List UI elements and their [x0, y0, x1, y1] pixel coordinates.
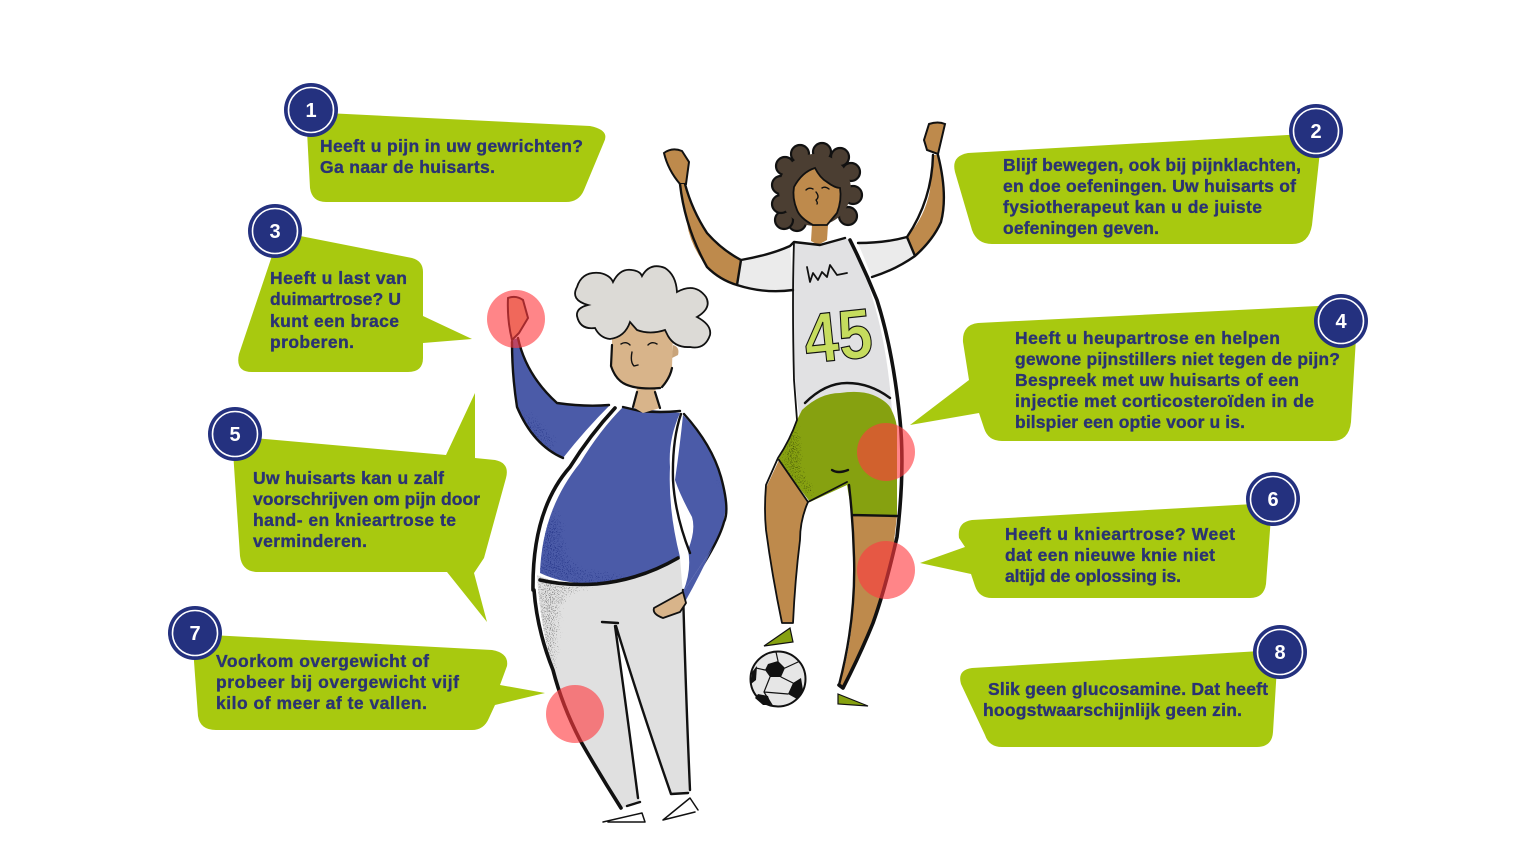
woman: trouser outlines	[534, 590, 690, 808]
bubble 8 text: Slik geen glucosamine. Dat heeft	[988, 679, 1268, 699]
bubble 8 badge: 8	[1274, 642, 1286, 664]
bubble 4 text: bilspier een optie voor u is.	[1015, 412, 1245, 432]
bubble 1 badge: 1	[305, 100, 317, 122]
bubble 7	[168, 606, 545, 730]
bubble 3 badge: 3	[269, 221, 281, 243]
woman: hair	[575, 266, 710, 348]
athlete: left arm	[680, 184, 741, 285]
bubble 6 text: dat een nieuwe knie niet	[1005, 545, 1215, 565]
athlete: shirt number: 45	[800, 294, 876, 378]
bubble 3 text	[270, 268, 407, 352]
bubble 1 shape	[306, 112, 605, 202]
athlete: neck	[811, 225, 828, 245]
athlete: shirt chest graph	[807, 265, 847, 282]
bubble 2 badge: 2	[1310, 121, 1322, 143]
athlete: right arm	[907, 155, 943, 256]
woman: hand on hip	[654, 592, 686, 618]
woman: ear	[672, 345, 678, 358]
bubble 3 text: duimartrose? U	[270, 289, 401, 309]
athlete: right sleeve	[858, 237, 915, 277]
athlete: right leg	[839, 516, 897, 688]
bubble 5	[208, 393, 507, 622]
woman: torso shading	[540, 509, 624, 582]
bubble 6 text	[1005, 524, 1235, 586]
bubble 7 text	[216, 651, 459, 713]
bubble 4 text: Bespreek met uw huisarts of een	[1015, 370, 1299, 390]
bubble 7 badge	[168, 606, 222, 660]
bubble 7 text: Voorkom overgewicht of	[216, 651, 429, 671]
bubble 2 shape	[954, 133, 1322, 244]
woman: torso	[540, 407, 680, 583]
bubble 4 shape with tail	[910, 304, 1358, 441]
athlete: shorts shading	[780, 426, 877, 514]
illustration: older woman with arthritis	[508, 266, 730, 822]
bubble 4 badge: 4	[1335, 311, 1347, 333]
bubble 7 text: probeer bij overgewicht vijf	[216, 672, 459, 692]
bubble 5 badge: 5	[229, 424, 241, 446]
bubble 3 shape with tail	[238, 232, 472, 372]
woman: neck	[633, 388, 660, 413]
bubble 4 text: injectie met corticosteroïden in de	[1015, 391, 1314, 411]
bubble 6 text: Heeft u knieartrose? Weet	[1005, 524, 1235, 544]
woman: trousers	[537, 558, 690, 808]
bubble 2 text	[1003, 155, 1301, 238]
woman: hand	[508, 297, 528, 340]
athlete: shorts	[778, 392, 897, 515]
woman: shoes	[603, 798, 698, 822]
athlete: left hand	[664, 149, 689, 184]
athlete: sleeve shading	[737, 248, 915, 294]
bubble 8	[960, 625, 1307, 747]
woman: raised arm shading	[522, 410, 557, 450]
illustration: athlete with football	[664, 122, 945, 706]
athlete: left thigh and shin	[765, 460, 808, 623]
woman: raised arm	[512, 338, 610, 458]
bubble 6 badge: 6	[1267, 489, 1279, 511]
bubble 6 text: altijd de oplossing is.	[1005, 566, 1181, 586]
bubble 4 text: Heeft u heupartrose en helpen	[1015, 328, 1280, 348]
bubble 1 text: Heeft u pijn in uw gewrichten?	[320, 136, 583, 156]
athlete: right hand	[924, 122, 945, 154]
bubble 1 badge	[284, 83, 338, 137]
bubble 7 text: kilo of meer af te vallen.	[216, 693, 427, 713]
bubble 4 text	[1015, 328, 1340, 432]
bubble 8 text	[983, 679, 1268, 720]
athlete: face details	[806, 187, 829, 204]
woman: face details	[611, 343, 672, 408]
bubble 4	[910, 294, 1368, 441]
athlete: left sleeve	[737, 246, 793, 291]
bubble 1 text	[320, 136, 583, 177]
bubble 8 badge	[1253, 625, 1307, 679]
bubble 1 text: Ga naar de huisarts.	[320, 157, 495, 177]
bubble 7 shape with tail	[192, 634, 545, 730]
bubble 5 shape with tails	[232, 393, 507, 622]
athlete: shirt	[793, 238, 892, 420]
bubble 5 text: voorschrijven om pijn door	[253, 489, 480, 509]
bubble 2 text: Blijf bewegen, ook bij pijnklachten,	[1003, 155, 1301, 175]
bubble 5 badge	[208, 407, 262, 461]
bubble 6	[920, 472, 1300, 598]
bubble 4 text: gewone pijnstillers niet tegen de pijn?	[1015, 349, 1340, 369]
athlete: hair	[772, 143, 862, 231]
bubble 3 text: Heeft u last van	[270, 268, 407, 288]
woman: trouser shading	[538, 576, 592, 668]
woman: body outlines	[512, 338, 726, 592]
bubble 1	[284, 83, 605, 202]
bubble 3 text: proberen.	[270, 332, 354, 352]
woman: right arm shading	[716, 478, 720, 482]
bubble 2 badge	[1289, 104, 1343, 158]
athlete: body outlines	[680, 155, 944, 688]
pain marker: thumb	[487, 290, 545, 348]
bubble 6 shape with tail	[920, 503, 1272, 598]
bubble 5 text: Uw huisarts kan u zalf	[253, 468, 444, 488]
football	[750, 652, 806, 706]
bubble 3	[238, 204, 472, 372]
bubble 4 badge	[1314, 294, 1368, 348]
bubble 2 text: oefeningen geven.	[1003, 218, 1159, 238]
bubble 7 badge: 7	[189, 623, 201, 645]
woman: right arm	[675, 415, 726, 592]
bubble 2 text: fysiotherapeut kan u de juiste	[1003, 197, 1262, 217]
woman: face	[612, 322, 673, 390]
pain marker: hip	[857, 423, 915, 481]
bubble 5 text	[253, 468, 480, 551]
pain marker: knee woman	[546, 685, 604, 743]
bubble 5 text: verminderen.	[253, 531, 367, 551]
bubble 8 text: hoogstwaarschijnlijk geen zin.	[983, 700, 1242, 720]
bubble 8 shape	[960, 650, 1278, 747]
bubble 2	[954, 104, 1343, 244]
bubble 3 text: kunt een brace	[270, 311, 399, 331]
woman: right sleeve end	[683, 547, 713, 600]
bubble 6 badge	[1246, 472, 1300, 526]
athlete: face	[793, 168, 841, 225]
athlete: shoes	[764, 628, 868, 706]
bubble 2 text: en doe oefeningen. Uw huisarts of	[1003, 176, 1296, 196]
bubble 3 badge	[248, 204, 302, 258]
pain marker: knee athlete	[857, 541, 915, 599]
bubble 5 text: hand- en knieartrose te	[253, 510, 456, 530]
